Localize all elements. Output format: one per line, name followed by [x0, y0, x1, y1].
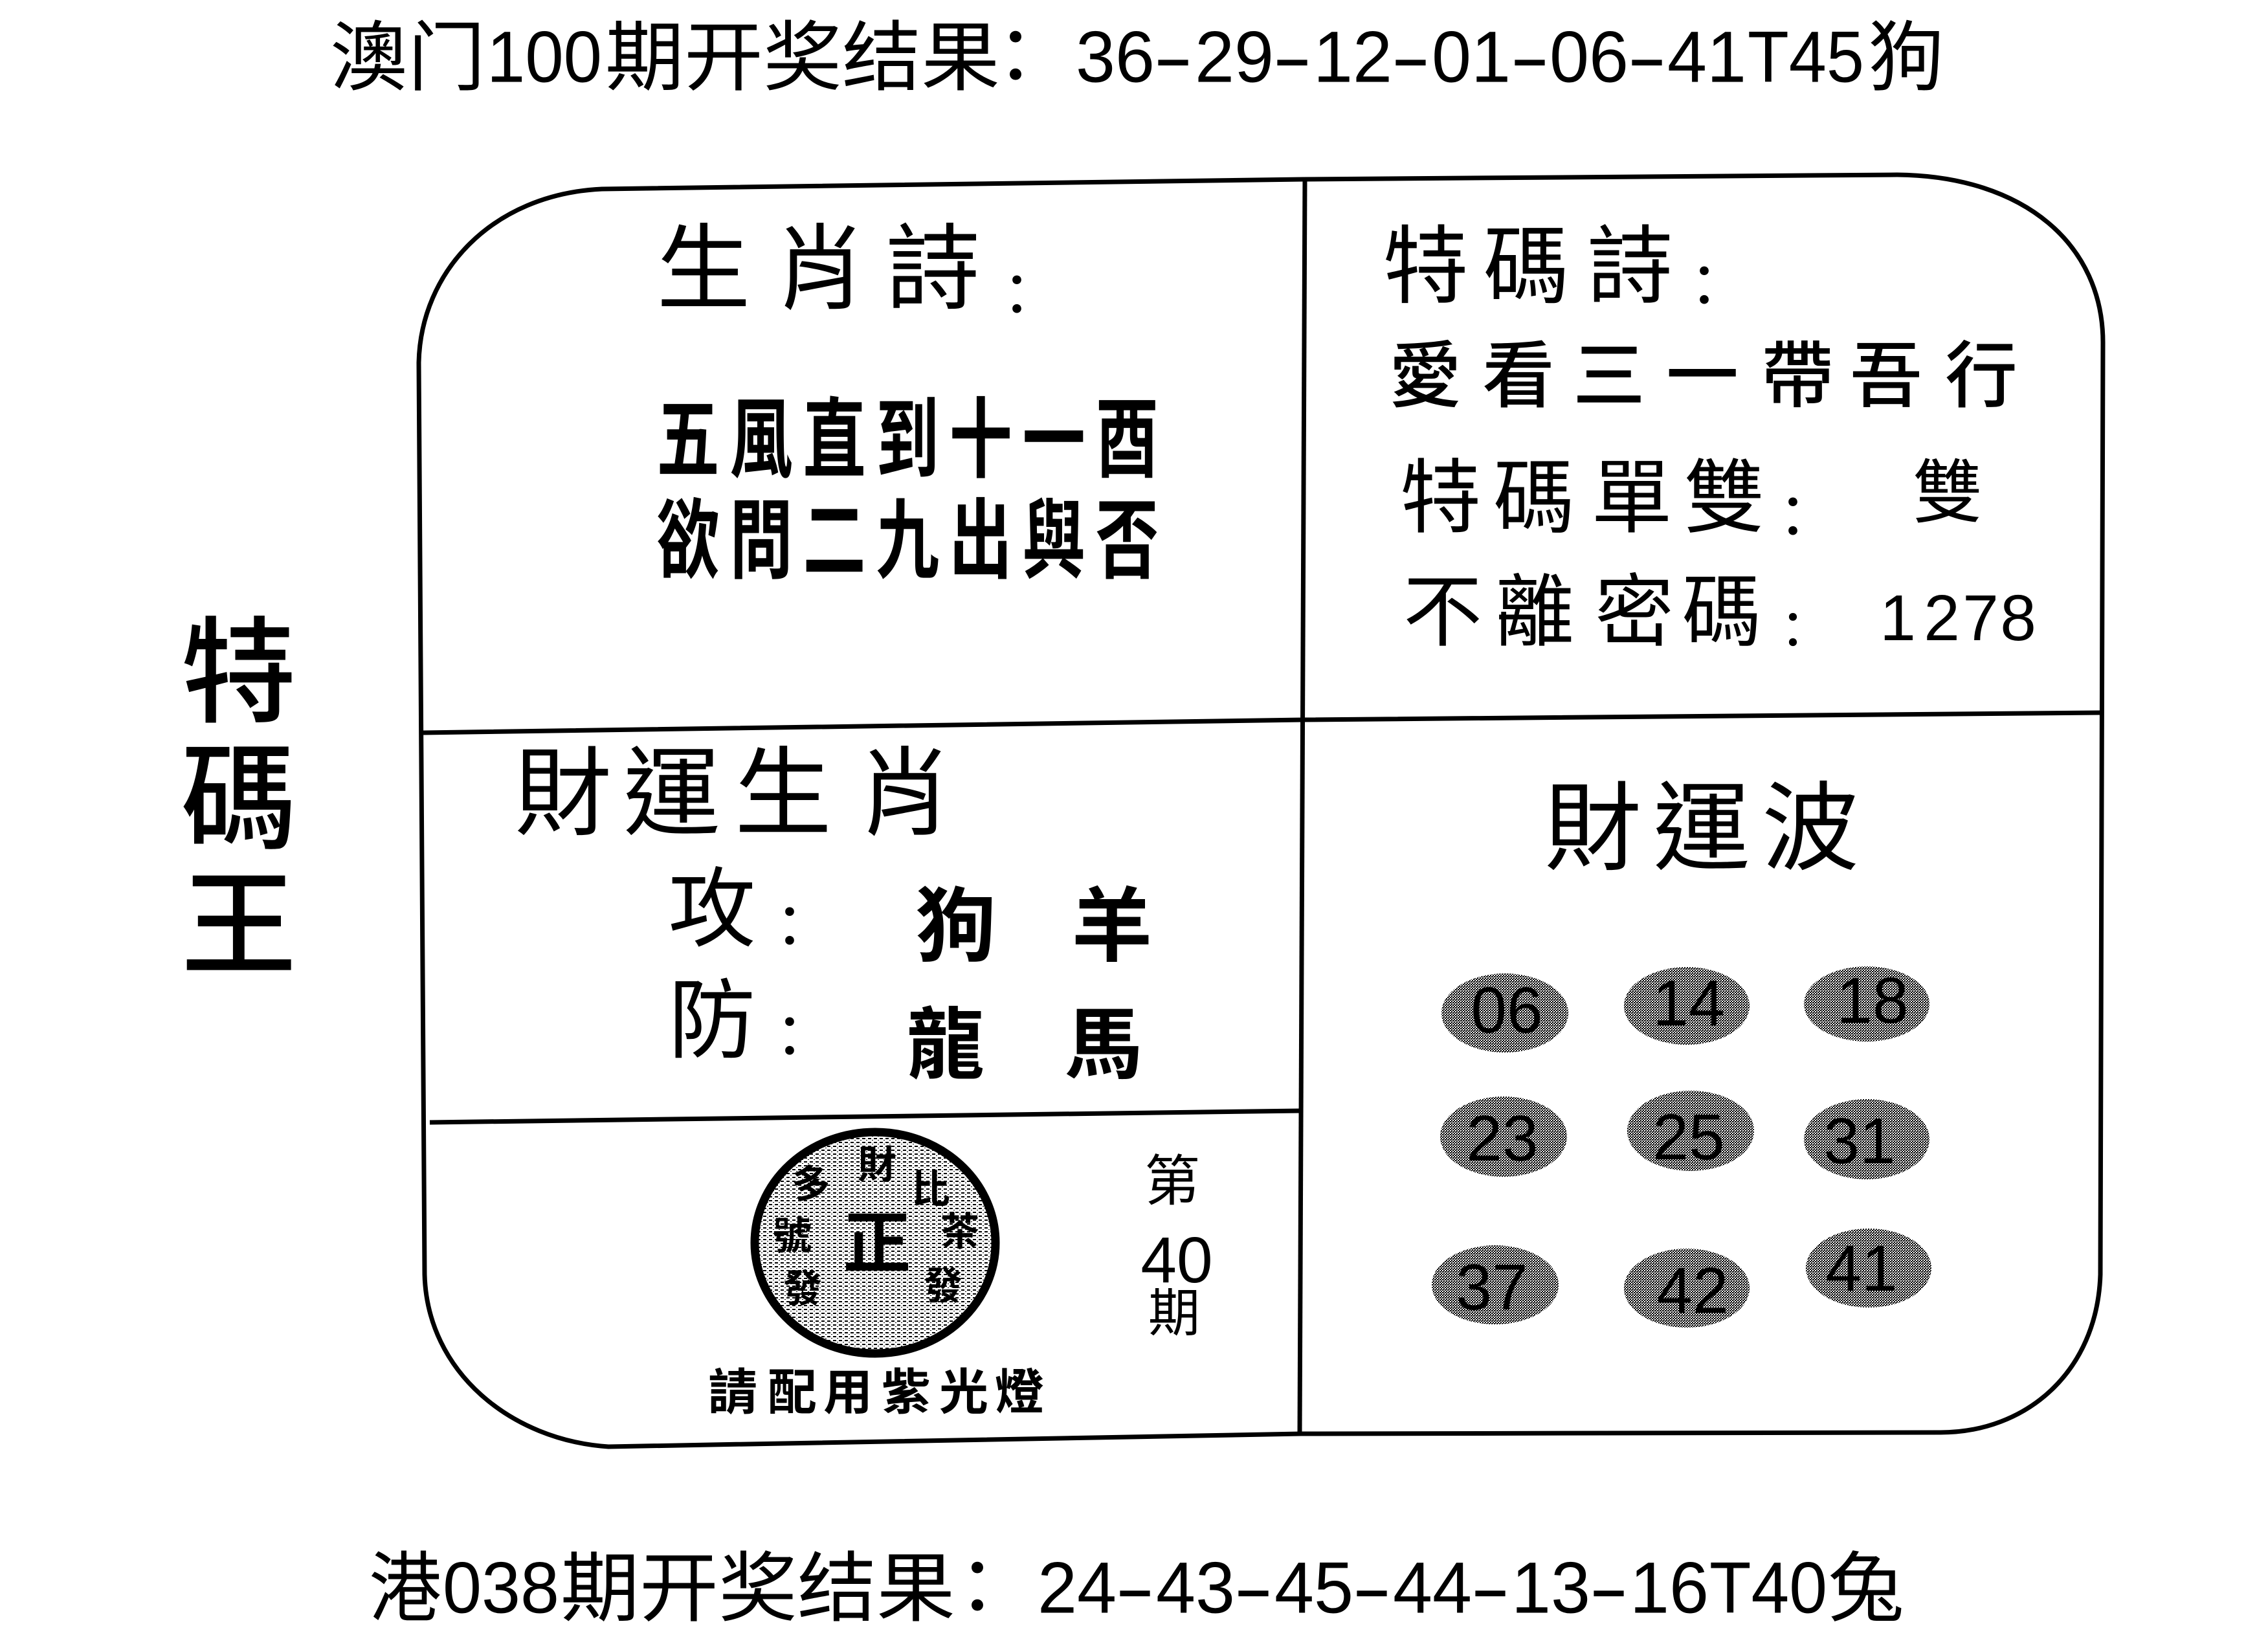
heading: 財運生肖: 財運生肖	[515, 739, 953, 848]
title: Macau draw result: 41	[1667, 17, 1746, 97]
footer: Hong Kong draw result: -	[1351, 1547, 1392, 1629]
secret numbers row	[1403, 568, 2036, 660]
odd or even row: 特碼單雙	[1401, 453, 1764, 544]
attack row	[668, 861, 1152, 972]
secret numbers row: 1278	[1880, 582, 2036, 654]
title: Macau draw result: 12	[1313, 17, 1392, 97]
title: Macau draw result: 06	[1550, 17, 1629, 97]
title: Macau draw result: 100	[487, 17, 602, 97]
heading: 生肖詩	[656, 217, 1046, 329]
icon: round seal: 財	[858, 1143, 896, 1187]
footer: Hong Kong draw result: -	[1233, 1547, 1274, 1629]
number balls: 18	[1836, 964, 1909, 1037]
icon: round seal: 多	[792, 1163, 830, 1207]
footer: Hong Kong draw result: 港	[369, 1546, 441, 1632]
number balls: 23	[1466, 1102, 1539, 1175]
title: Macau draw result: -	[1272, 17, 1313, 97]
vertical heading: 特碼王: 碼	[181, 735, 296, 863]
footer: Hong Kong draw result: -	[1470, 1547, 1511, 1629]
icon: round seal: 正	[843, 1207, 911, 1282]
secret numbers row: 不離密碼	[1403, 568, 1761, 656]
attack row: ：	[761, 896, 819, 961]
footer: Hong Kong draw result: 44	[1393, 1547, 1472, 1629]
title: Macau draw result: 期开奖结果	[605, 16, 1000, 101]
attack row: 狗羊	[915, 882, 1152, 972]
heading: 特碼詩: 詩	[1587, 219, 1673, 315]
panel: fortune wave	[1432, 774, 1931, 1328]
footer: Hong Kong draw result: 038	[443, 1547, 559, 1629]
footer: Hong Kong draw result: 期开奖结果	[561, 1546, 955, 1632]
poem lines: 五風直到十一酉	[656, 392, 1159, 489]
issue number: 第	[1144, 1151, 1200, 1213]
heading: 生肖詩: ：	[988, 264, 1046, 329]
title: Macau draw result: 01	[1432, 17, 1511, 97]
title: Macau draw result: 29	[1195, 17, 1274, 97]
icon: round seal	[755, 1132, 995, 1353]
heading: 特碼詩	[1383, 219, 1733, 320]
defence row: 防	[668, 972, 756, 1069]
footer: Hong Kong draw result: 兔	[1828, 1546, 1904, 1632]
attack row: 攻	[668, 861, 756, 958]
title: Macau draw result: ：	[977, 16, 1054, 101]
panel: fortune zodiac	[515, 739, 1152, 1089]
heading: 生肖詩: 詩	[885, 217, 980, 322]
number balls: 31	[1823, 1105, 1896, 1177]
panel: special number poem	[1383, 219, 2036, 660]
title: Macau draw result: 澳门	[330, 16, 485, 101]
issue number: 40	[1140, 1224, 1213, 1297]
number balls: 25	[1652, 1101, 1725, 1174]
heading: 生肖詩: 生	[656, 217, 751, 322]
title: Macau draw result: -	[1509, 17, 1550, 97]
number balls	[1432, 964, 1931, 1328]
title: Macau draw result: -	[1390, 17, 1431, 97]
footer: Hong Kong draw result	[369, 1546, 1904, 1632]
defence row: ：	[761, 1006, 819, 1071]
number balls: 14	[1652, 967, 1725, 1040]
panel: rounded frame with dividers	[419, 175, 2103, 1447]
title: Macau draw result: 36	[1076, 17, 1155, 97]
title: Macau draw result: -	[1153, 17, 1194, 97]
heading: 生肖詩: 肖	[773, 217, 867, 322]
footer: Hong Kong draw result: 16	[1630, 1547, 1709, 1629]
icon: round seal: 比	[911, 1168, 950, 1212]
heading: 特碼詩: 特	[1383, 219, 1469, 315]
footer: Hong Kong draw result: 45	[1274, 1547, 1353, 1629]
defence row: 龍馬	[907, 1002, 1142, 1089]
issue number	[1140, 1151, 1213, 1342]
vertical heading: 特碼王: 特	[181, 608, 296, 738]
heading: 特碼詩: ：	[1675, 255, 1733, 320]
secret numbers row: ：	[1767, 602, 1819, 660]
footer: Hong Kong draw result: 13	[1511, 1547, 1590, 1629]
footer: Hong Kong draw result: 43	[1156, 1547, 1235, 1629]
poem line: 愛看三一帶吾行	[1389, 335, 2018, 417]
number balls: 41	[1825, 1232, 1898, 1305]
heading: 財運波: 財運波	[1544, 774, 1859, 883]
poem lines: 欲問二九出與否	[656, 493, 1159, 590]
icon: round seal: 號	[773, 1214, 812, 1258]
vertical heading: 特碼王	[181, 608, 296, 990]
caption: 請配用紫光燈: 請配用紫光燈	[708, 1366, 1044, 1420]
title: Macau draw result	[330, 16, 1944, 101]
odd or even row	[1401, 453, 1983, 551]
icon: round seal: 發	[783, 1267, 822, 1310]
issue number: 期	[1148, 1284, 1200, 1342]
footer: Hong Kong draw result: -	[1115, 1547, 1155, 1629]
vertical heading: 特碼王: 王	[181, 861, 296, 990]
odd or even row: 雙	[1913, 453, 1983, 532]
footer: Hong Kong draw result: 24	[1038, 1547, 1117, 1629]
odd or even row: ：	[1764, 486, 1822, 551]
footer: Hong Kong draw result: -	[1588, 1547, 1629, 1629]
heading: 特碼詩: 碼	[1484, 219, 1569, 315]
footer: Hong Kong draw result: ：	[939, 1546, 1016, 1632]
poem lines	[656, 392, 1159, 590]
number balls: 37	[1456, 1251, 1528, 1324]
number balls: 42	[1656, 1254, 1729, 1327]
title: Macau draw result: T45	[1748, 17, 1864, 97]
number balls: 06	[1471, 974, 1543, 1047]
icon: round seal: 發	[924, 1265, 962, 1308]
title: Macau draw result: -	[1627, 17, 1667, 97]
defence row	[668, 972, 1142, 1089]
footer: Hong Kong draw result: T40	[1709, 1547, 1827, 1629]
title: Macau draw result: 狗	[1868, 16, 1944, 101]
panel: seal and issue	[708, 1132, 1213, 1420]
panel: zodiac poem	[656, 217, 1159, 590]
icon: round seal: 茶	[940, 1210, 979, 1253]
